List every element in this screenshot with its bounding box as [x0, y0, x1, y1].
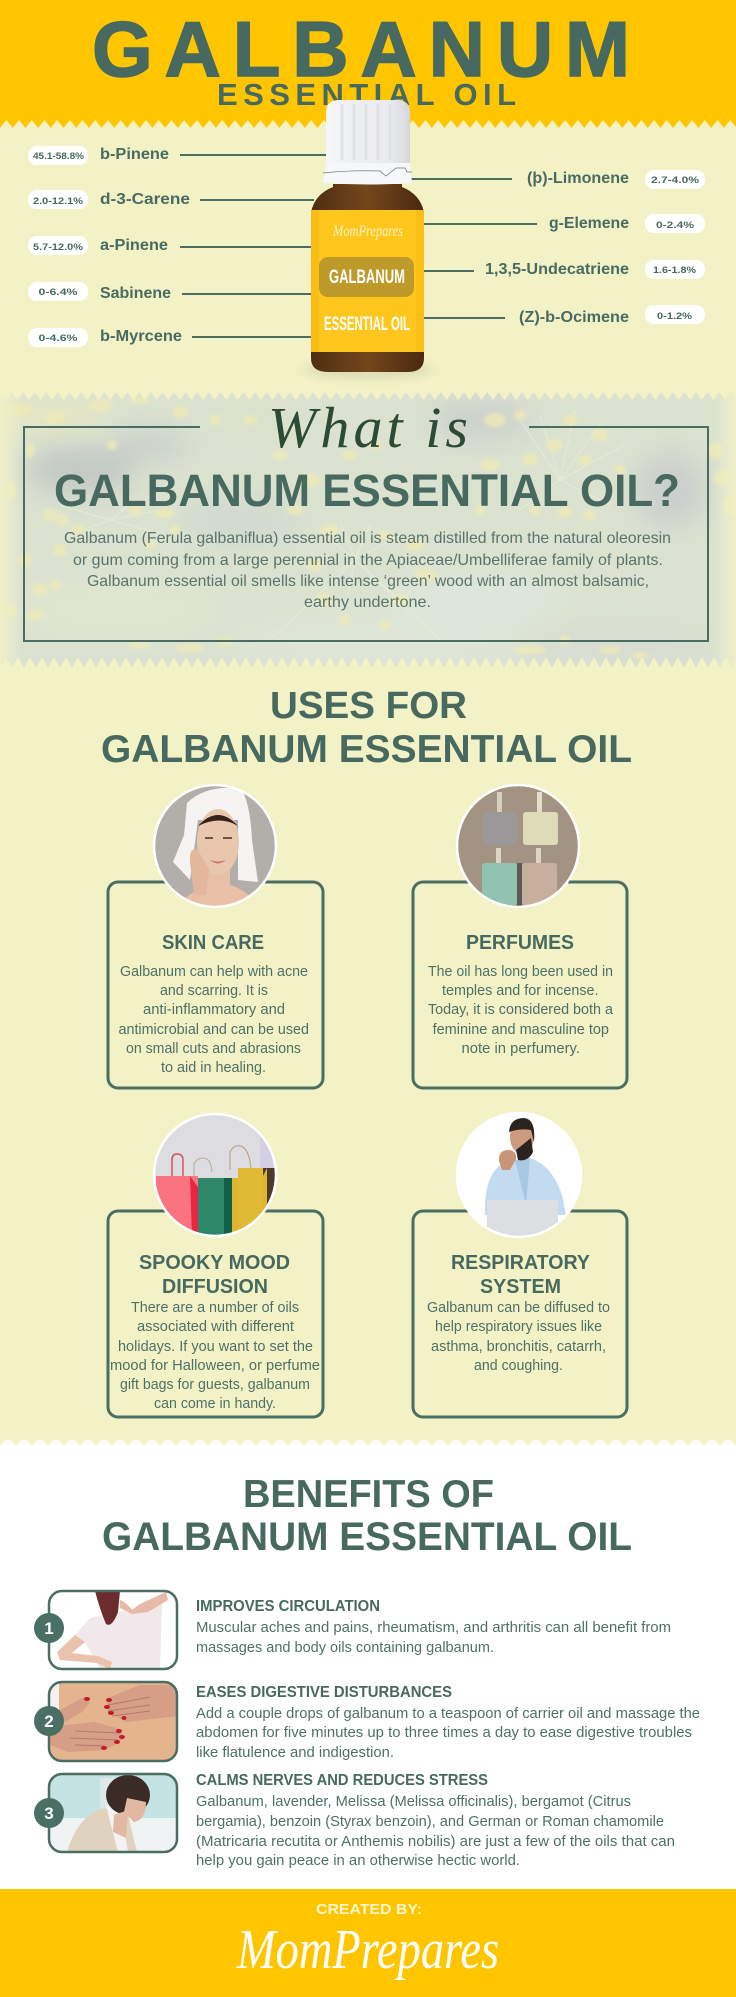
header banner	[0, 0, 736, 128]
left compound list: 0-4.6%	[38, 333, 78, 344]
text: and scarring. It is	[160, 983, 268, 999]
text	[196, 1705, 700, 1761]
card: spooky mood diffusion	[108, 1110, 323, 1417]
heading: uses for	[101, 685, 632, 771]
title: Galbanum: GALBANUM	[92, 5, 630, 93]
text	[428, 964, 614, 1057]
number 2: 2	[44, 1712, 54, 1731]
logo: MomPrepares	[236, 1919, 499, 1981]
title: DIFFUSION	[162, 1276, 268, 1298]
right compound list	[411, 170, 705, 326]
text	[118, 964, 309, 1076]
left compound list: 45.1-58.8%	[33, 151, 85, 162]
text: on small cuts and abrasions	[126, 1041, 301, 1057]
subtitle: essential oil: ESSENTIAL OIL	[217, 77, 516, 112]
right compound list: (Z)-b-Ocimene	[519, 309, 629, 326]
left compound list: d-3-Carene	[100, 191, 190, 208]
benefit 3: calms nerves	[34, 1772, 675, 1869]
title: PERFUMES	[466, 932, 574, 954]
heading: galbanum essential oil: GALBANUM ESSENTIAL OIL?	[54, 465, 680, 516]
number 1	[34, 1613, 64, 1643]
text: note in perfumery.	[462, 1041, 580, 1057]
card: respiratory system	[413, 1112, 627, 1417]
left compound list: b-Pinene	[100, 146, 169, 163]
title: RESPIRATORY	[451, 1252, 591, 1274]
title: CALMS NERVES AND REDUCES STRESS	[196, 1772, 488, 1789]
heading: benefits of: GALBANUM ESSENTIAL OIL	[102, 1515, 632, 1559]
text: feminine and masculine top	[433, 1022, 609, 1038]
card: perfumes	[413, 780, 627, 1088]
right compound list: 2.7-4.0%	[651, 175, 700, 186]
text: Galbanum can help with acne	[120, 964, 308, 980]
number 1: 1	[44, 1619, 54, 1638]
heading: benefits of: BENEFITS OF	[243, 1473, 494, 1516]
right compound list: 1,3,5-Undecatriene	[485, 261, 629, 278]
description: earthy undertone.	[304, 594, 431, 611]
text	[110, 1300, 320, 1412]
text	[427, 1300, 610, 1374]
text: mood for Halloween, or perfume	[110, 1358, 320, 1374]
bottle label plate	[319, 257, 414, 297]
text: gift bags for guests, galbanum	[120, 1377, 310, 1393]
card: skin care	[108, 780, 323, 1088]
description: Galbanum (Ferula galbaniflua) essential oil is steam distilled from the natural oleoresin	[64, 530, 671, 547]
text	[196, 1793, 675, 1869]
number 3: 3	[44, 1804, 54, 1823]
text: (Matricaria recutita or Anthemis nobilis) are just a few of the oils that can	[196, 1833, 675, 1850]
text: massages and body oils containing galbanum.	[196, 1639, 494, 1656]
text: Add a couple drops of galbanum to a teaspoon of carrier oil and massage the	[196, 1705, 700, 1722]
right compound list: g-Elemene	[549, 215, 629, 232]
left compound list: 5.7-12.0%	[33, 242, 84, 253]
photo: gift bags	[150, 1110, 280, 1240]
text: can come in handy.	[154, 1396, 276, 1412]
number 2	[34, 1706, 64, 1736]
background photo of flowers	[0, 392, 736, 668]
text: like flatulence and indigestion.	[196, 1744, 394, 1761]
photo: stressed woman	[49, 1774, 177, 1852]
text	[196, 1619, 671, 1656]
right compound list: 0-2.4%	[656, 220, 695, 231]
title: SKIN CARE	[162, 932, 264, 954]
icon: essential oil bottle	[302, 100, 434, 379]
text: to aid in healing.	[161, 1060, 266, 1076]
left compound list: 0-6.4%	[38, 287, 78, 298]
left compound list: 2.0-12.1%	[33, 196, 84, 207]
photo: woman holding back	[49, 1591, 177, 1669]
text: abdomen for five minutes up to three times a day to ease digestive troubles	[196, 1724, 692, 1741]
photo: hands on abdomen	[49, 1682, 178, 1761]
text: associated with different	[137, 1319, 294, 1335]
title: SPOOKY MOOD	[139, 1252, 290, 1274]
text: Galbanum, lavender, Melissa (Melissa officinalis), bergamot (Citrus	[196, 1793, 631, 1810]
text: Galbanum can be diffused to	[427, 1300, 610, 1316]
left compound list: a-Pinene	[100, 237, 168, 254]
text: and coughing.	[474, 1358, 563, 1374]
description	[64, 530, 671, 611]
text: temples and for incense.	[442, 983, 598, 999]
icon: essential oil bottle: ESSENTIAL OIL	[324, 314, 410, 335]
number 3	[34, 1798, 64, 1828]
text: asthma, bronchitis, catarrh,	[431, 1339, 606, 1355]
icon: essential oil bottle: GALBANUM	[329, 267, 405, 288]
footer	[0, 1889, 736, 1997]
photo: coughing man	[456, 1112, 582, 1240]
benefit 2: digestive	[34, 1682, 700, 1761]
text: The oil has long been used in	[428, 964, 613, 980]
left compound list: Sabinene	[100, 285, 171, 302]
text: anti-inflammatory and	[143, 1002, 285, 1018]
photo: perfume bottles	[456, 784, 580, 908]
text: help you gain peace in an otherwise hectic world.	[196, 1852, 520, 1869]
text: holidays. If you want to set the	[118, 1339, 313, 1355]
script heading: what is: What is	[268, 395, 468, 460]
photo: woman with towel	[150, 780, 280, 910]
text: Today, it is considered both a	[428, 1002, 614, 1018]
title	[139, 1252, 290, 1298]
text: There are a number of oils	[131, 1300, 299, 1316]
frame	[24, 427, 708, 641]
created by: CREATED BY:	[316, 1902, 422, 1918]
title	[451, 1252, 591, 1298]
white benefits background	[0, 1439, 736, 1889]
benefit 1: circulation	[34, 1591, 671, 1669]
left compound list: b-Myrcene	[100, 328, 182, 345]
heading: benefits of	[102, 1473, 632, 1559]
text: antimicrobial and can be used	[118, 1022, 309, 1038]
right compound list: 1.6-1.8%	[653, 265, 697, 276]
heading: uses for: USES FOR	[270, 685, 467, 727]
panel: what is galbanum	[0, 392, 736, 668]
title: EASES DIGESTIVE DISTURBANCES	[196, 1684, 452, 1701]
title: IMPROVES CIRCULATION	[196, 1598, 380, 1615]
heading: uses for: GALBANUM ESSENTIAL OIL	[101, 728, 632, 771]
text: bergamia), benzoin (Styrax benzoin), and German or Roman chamomile	[196, 1813, 664, 1830]
left compound list	[28, 146, 326, 347]
right compound list: (þ)-Limonene	[527, 170, 629, 187]
description: or gum coming from a large perennial in the Apiaceae/Umbelliferae family of plants.	[73, 552, 663, 569]
description: Galbanum essential oil smells like intense ‘green’ wood with an almost balsamic,	[87, 573, 649, 590]
icon: essential oil bottle: MomPrepares	[332, 223, 403, 240]
right compound list: 0-1.2%	[657, 311, 693, 322]
title: SYSTEM	[480, 1276, 561, 1298]
text: help respiratory issues like	[435, 1319, 602, 1335]
text: Muscular aches and pains, rheumatism, and arthritis can all benefit from	[196, 1619, 671, 1636]
